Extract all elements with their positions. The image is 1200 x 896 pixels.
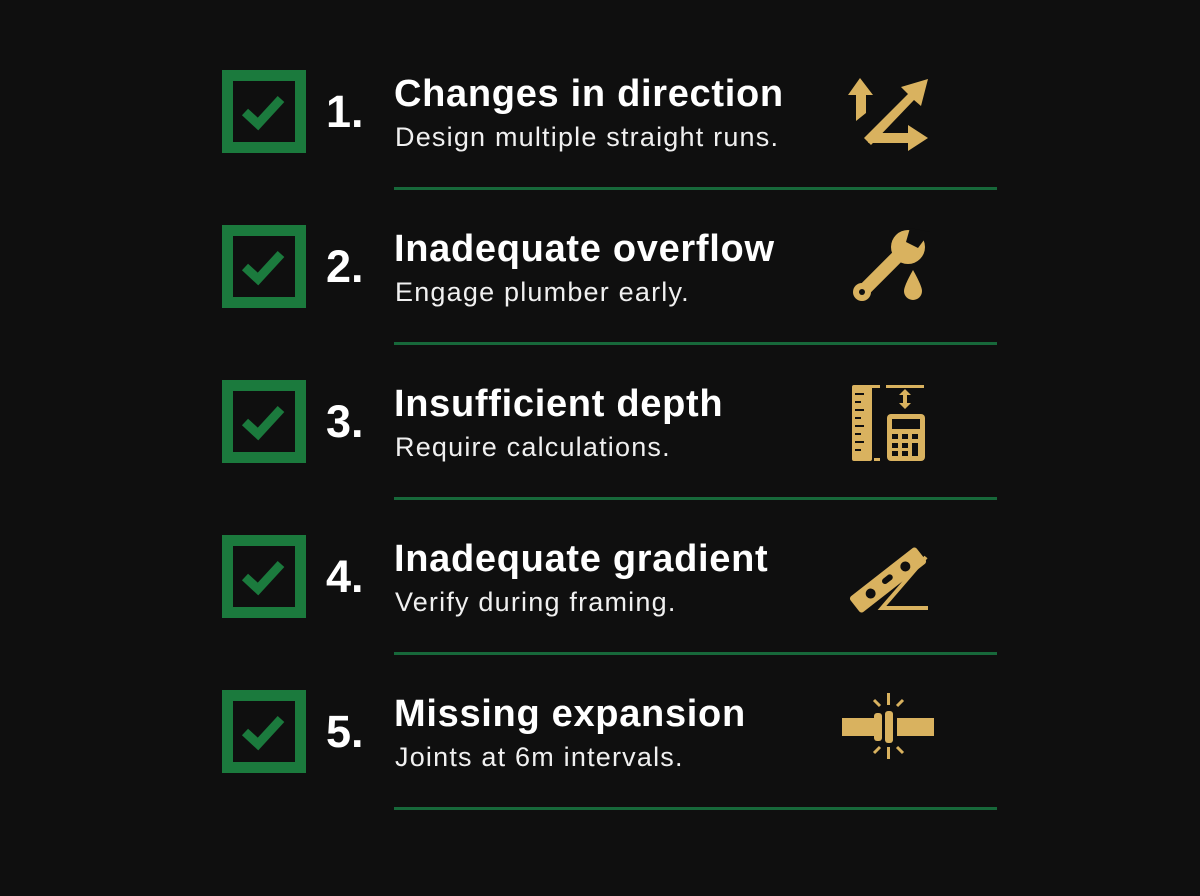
row 4 <box>222 535 997 655</box>
text: Engage plumber early. <box>395 277 690 307</box>
number: 4. <box>326 551 364 602</box>
text: Joints at 6m intervals. <box>395 742 684 772</box>
checkbox <box>222 380 306 463</box>
number: 2. <box>326 241 364 292</box>
checkbox <box>222 225 306 308</box>
heading: Inadequate gradient <box>394 538 768 580</box>
icon: expansion joint <box>842 693 934 759</box>
checkbox <box>222 535 306 618</box>
icon: spirit level <box>850 548 928 612</box>
text: Require calculations. <box>395 432 671 462</box>
row 5 <box>222 690 997 810</box>
number: 1. <box>326 86 364 137</box>
heading: Missing expansion <box>394 693 746 735</box>
number: 5. <box>326 706 364 757</box>
row 3 <box>222 380 997 500</box>
number: 3. <box>326 396 364 447</box>
row 2 <box>222 225 997 345</box>
text: Design multiple straight runs. <box>395 122 779 152</box>
icon: arrows <box>848 78 928 151</box>
icon: wrench <box>853 230 925 301</box>
heading: Changes in direction <box>394 73 784 115</box>
icon: ruler and calculator <box>852 385 925 461</box>
text: Verify during framing. <box>395 587 677 617</box>
row 1 <box>222 70 997 190</box>
checkbox <box>222 70 306 153</box>
checkbox <box>222 690 306 773</box>
heading: Inadequate overflow <box>394 228 775 270</box>
heading: Insufficient depth <box>394 383 723 425</box>
